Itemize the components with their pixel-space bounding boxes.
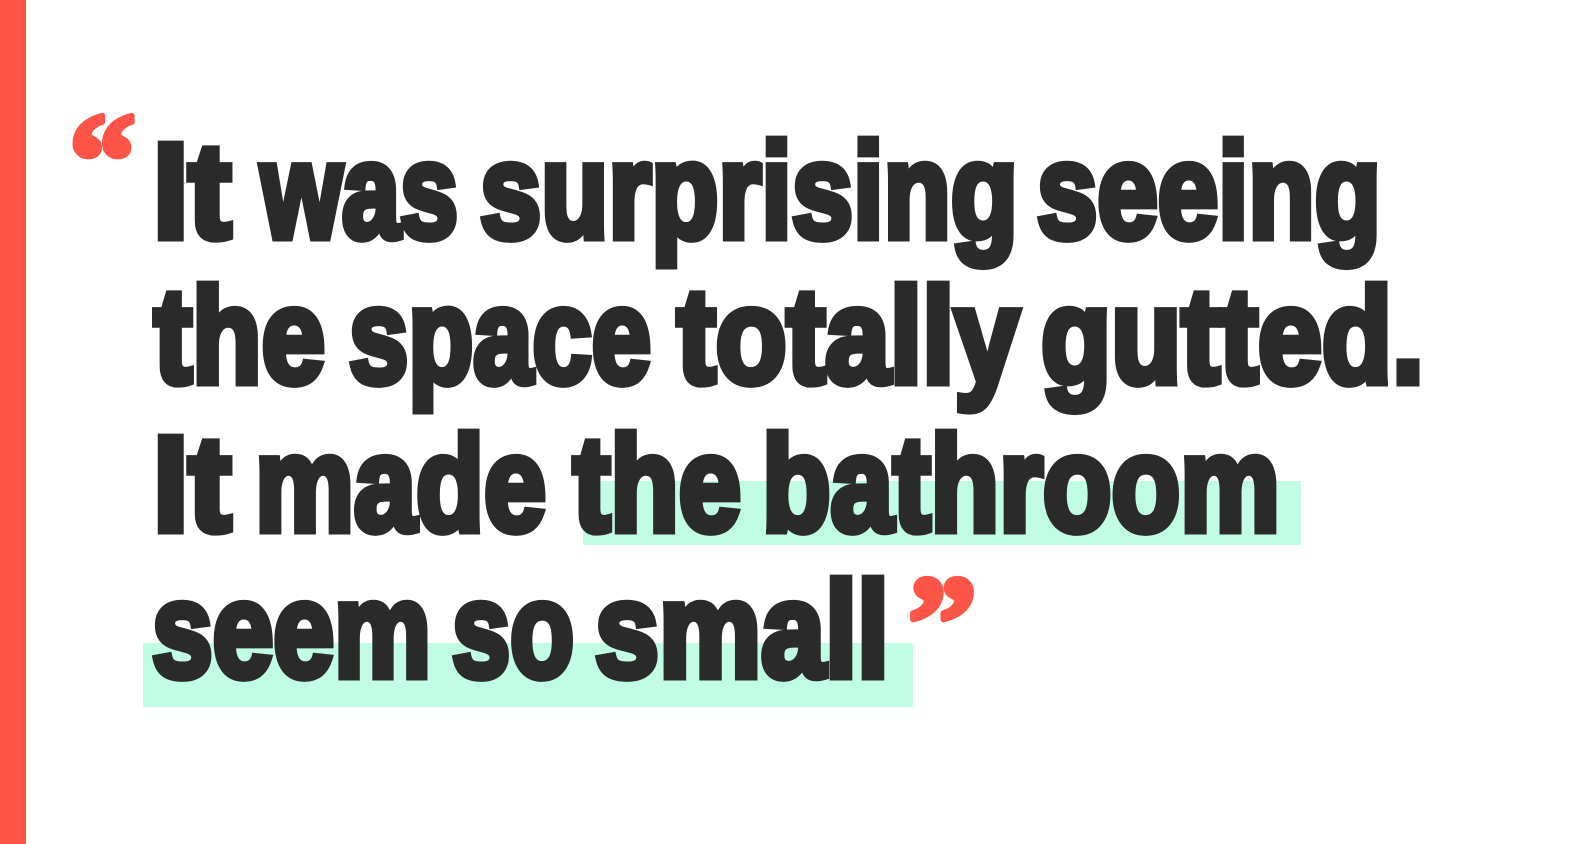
line 2: space bbox=[349, 260, 651, 412]
line 2 bbox=[154, 260, 1424, 412]
closing quotation mark: ” bbox=[908, 549, 977, 697]
line 1: surprising bbox=[480, 116, 1018, 266]
line 4: so bbox=[452, 554, 574, 706]
line 2: gutted. bbox=[1041, 260, 1424, 412]
opening quotation mark: “ bbox=[69, 86, 136, 234]
line 1: seeing bbox=[1037, 116, 1381, 266]
line 2: totally bbox=[677, 260, 1019, 412]
line 3: made bbox=[255, 408, 546, 560]
quote text bbox=[152, 116, 1424, 706]
line 3: It bbox=[153, 408, 231, 560]
line 3 bbox=[153, 408, 1280, 560]
line 3: bathroom bbox=[762, 408, 1280, 560]
line 1: was bbox=[260, 116, 458, 266]
line 4: seem bbox=[152, 554, 431, 706]
highlight: seem so small bbox=[143, 643, 913, 707]
left accent bar bbox=[0, 0, 26, 844]
line 2: the bbox=[154, 260, 325, 412]
line 3: the bbox=[573, 408, 741, 560]
line 1: It bbox=[153, 116, 231, 266]
line 4 bbox=[152, 554, 889, 706]
line 1 bbox=[153, 116, 1381, 266]
line 4: small bbox=[595, 554, 889, 706]
highlight: the bathroom bbox=[583, 481, 1301, 545]
